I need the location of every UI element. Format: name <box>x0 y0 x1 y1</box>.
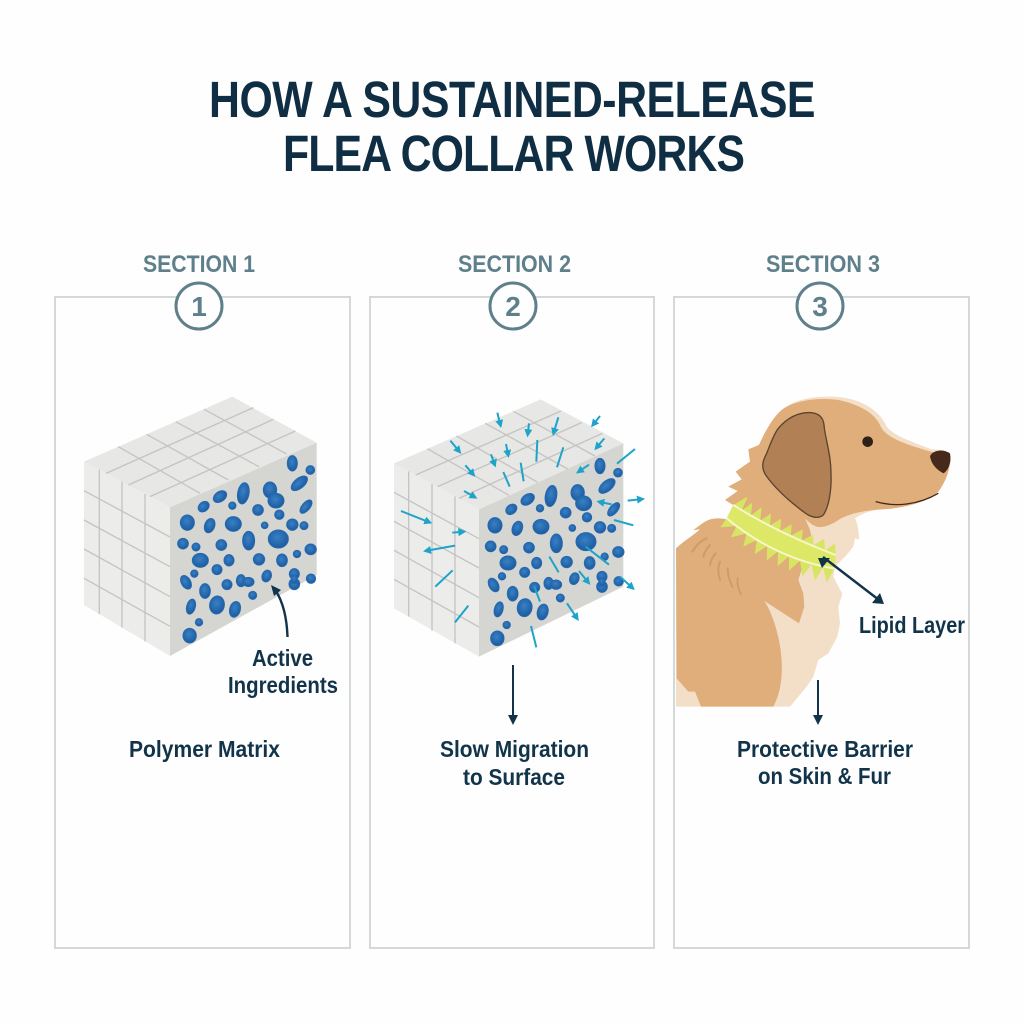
label: protective barrier: Protective Barrier <box>737 736 913 762</box>
dog illustration <box>676 397 951 707</box>
label: active ingredients: Active <box>252 645 313 671</box>
label: protective barrier <box>737 736 913 789</box>
ear <box>763 413 831 517</box>
section 2 heading: SECTION 2 <box>458 251 571 278</box>
label: slow migration <box>440 736 589 790</box>
label: protective barrier: on Skin & Fur <box>758 763 891 789</box>
number badge 3: 3 <box>812 291 828 322</box>
number badge 1: 1 <box>191 291 207 322</box>
panel: section 3 <box>674 251 969 948</box>
title: FLEA COLLAR WORKS <box>283 124 745 182</box>
mouth <box>876 493 938 505</box>
arrow: lipid layer double-headed <box>818 557 884 604</box>
polymer matrix cube <box>84 397 317 656</box>
label: slow migration: to Surface <box>463 764 565 790</box>
section 3 heading: SECTION 3 <box>766 251 880 278</box>
migration arrows <box>401 413 643 647</box>
arrow: to active ingredients <box>271 585 288 637</box>
number badge 1 <box>176 283 222 329</box>
label: slow migration: Slow Migration <box>440 736 589 762</box>
panel: section 1 <box>55 251 350 948</box>
number badge 3 <box>797 283 843 329</box>
label: active ingredients <box>228 645 338 698</box>
lipid layer collar <box>720 497 836 583</box>
title: HOW A SUSTAINED-RELEASE <box>209 70 815 128</box>
arrow: down to protective barrier <box>813 680 823 725</box>
number badge 2 <box>490 283 536 329</box>
label: polymer matrix: Polymer Matrix <box>129 736 280 762</box>
eye <box>862 436 873 447</box>
label: active ingredients: Ingredients <box>228 672 338 698</box>
nose <box>930 451 950 473</box>
section 1 heading: SECTION 1 <box>143 251 255 278</box>
migration cube <box>394 399 643 657</box>
label: lipid layer: Lipid Layer <box>859 612 965 638</box>
number badge 2: 2 <box>505 291 521 322</box>
panel: section 2 <box>370 251 654 948</box>
fur marks <box>692 538 741 594</box>
title <box>209 70 815 182</box>
arrow: down to slow migration <box>508 665 518 725</box>
